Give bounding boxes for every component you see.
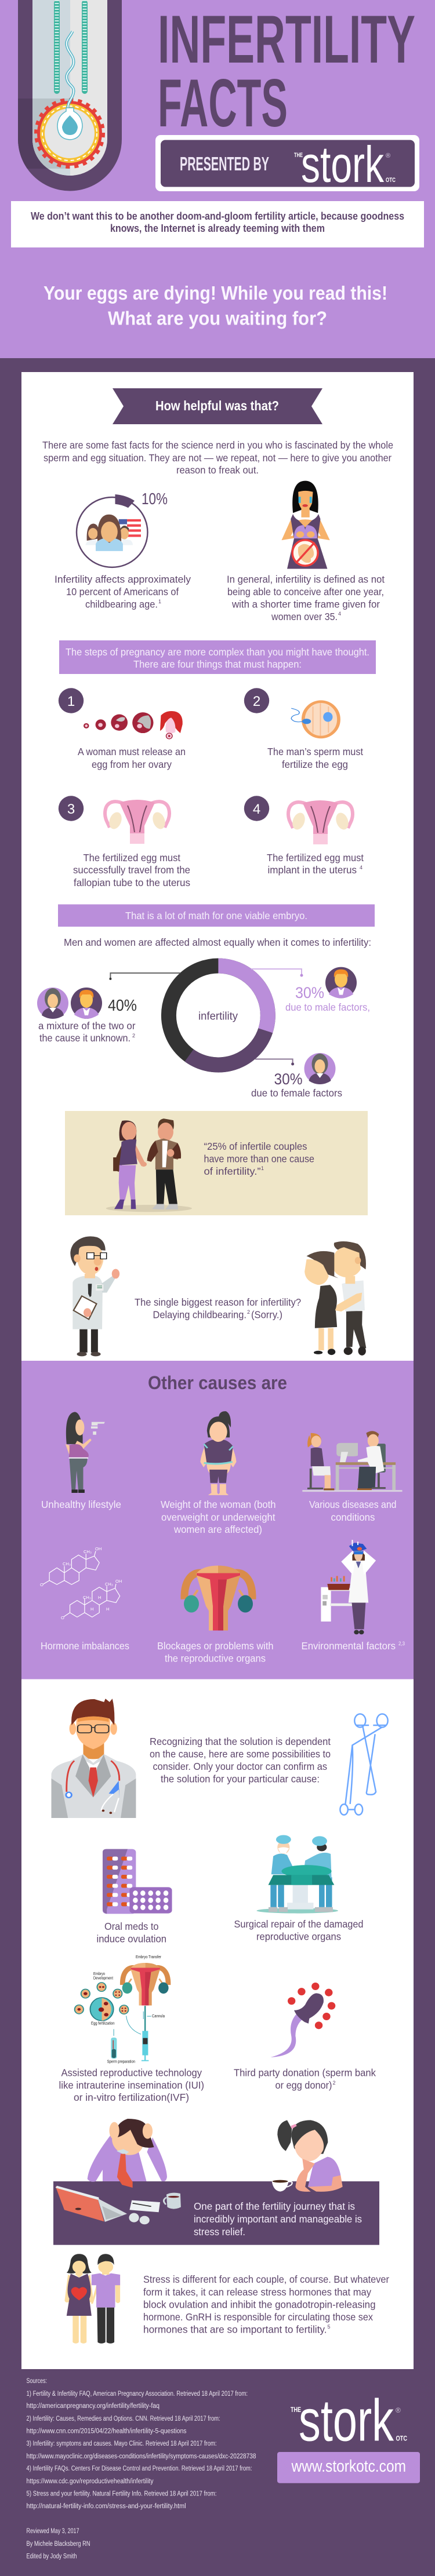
text: 10 percent of Americans: 10 percent of Americans of: [66, 586, 179, 597]
illustration: hormone molecules: CH₃: [83, 1595, 91, 1600]
text: step 3: fallopian tube to the uterus: [74, 877, 190, 888]
text: assisted reproductive technology: [59, 2067, 204, 2103]
title: FACTS: [158, 65, 288, 141]
illustration: hormone molecules: CH₃: [105, 1582, 113, 1587]
text: oral meds: induce ovulation: [96, 1933, 166, 1945]
icon: sperm fertilizing egg: [291, 702, 339, 737]
text: step 3: [73, 852, 190, 888]
illustration: hormone molecules: CH₃: [63, 1561, 71, 1566]
text: third party donation: 2: [333, 2080, 336, 2086]
step 4: [244, 796, 364, 876]
stat: 40 percent mixed: a mixture of the two or: [38, 1020, 136, 1032]
heading ribbon: how helpful: How helpful was that?: [155, 398, 279, 413]
text: solution possibilities: Recognizing that the solution is dependent: [150, 1736, 331, 1747]
sources list: 4) Infertility FAQs. Centers For Disease Control and Prevention. Retrieved 18 April 2017 from:: [27, 2465, 252, 2472]
illustration: worried couple: [304, 1241, 366, 1356]
text: assisted reproductive technology: or in-vitro fertilization(IVF): [74, 2092, 189, 2103]
sources list: https://www.cdc.gov/reproductivehealth/infertility: [27, 2478, 154, 2485]
text: fast facts intro: reason to freak out.: [176, 464, 259, 476]
text: fast facts intro: sperm and egg situation. They are not — we repeat, not — here to give you another: [44, 452, 392, 464]
icon: test tube with sperm and egg: [18, 0, 122, 191]
text: 10 percent of Americans: Infertility affects approximately: [55, 574, 191, 585]
callout: steps of pregnancy: There are four things that must happen:: [133, 658, 302, 670]
stat: 30 percent female: due to female factors: [251, 1087, 342, 1099]
text: weight: overweight or underweight: [161, 1511, 276, 1523]
illustration: IVF diagram: Development: [93, 1976, 113, 1981]
website button: www.storkotc.com: [291, 2457, 406, 2476]
illustration: IVF diagram: Egg fertilization: [91, 2021, 115, 2026]
sources list: Sources:: [27, 2378, 47, 2385]
illustration: hormone molecules: O: [61, 1615, 64, 1620]
icon: ovarian follicles: [84, 711, 183, 739]
text: hormone imbalances: Hormone imbalances: [41, 1640, 129, 1652]
text: stress hormones: hormone. GnRH is responsible for circulating those sex: [143, 2311, 373, 2323]
illustration: IVF diagram: Cannula: [152, 2014, 165, 2018]
text: blockages: Blockages or problems with: [157, 1640, 274, 1652]
text: step 2: [267, 746, 363, 770]
illustration: IVF diagram: [75, 1955, 169, 2064]
icon: uterus implant: [288, 800, 353, 844]
sources list: Reviewed May 3, 2017: [27, 2528, 79, 2535]
icon: surgical forceps: [340, 1714, 388, 1815]
stat: 30 percent female: 30%: [274, 1070, 303, 1088]
text: third party donation: Third party donation (sperm bank: [234, 2067, 376, 2078]
presented by badge: OTC: [386, 177, 396, 184]
text: diseases: Various diseases and: [309, 1499, 397, 1510]
sources list: 1) Fertility & Infertility FAQ, American Pregnancy Association. Retrieved 18 April 2017 from:: [27, 2391, 248, 2398]
text: unhealthy lifestyle: Unhealthy lifestyle: [41, 1499, 121, 1510]
text: quote: 1: [261, 1165, 264, 1171]
callout: lot of math: That is a lot of math for one viable embryo.: [125, 910, 307, 921]
text: men and women affected: Men and women are affected almost equally when it comes to infertility:: [64, 937, 371, 948]
step 2: 2: [253, 694, 260, 709]
text: assisted reproductive technology: Assisted reproductive technology: [61, 2067, 202, 2078]
text: step 4: [267, 852, 364, 876]
text: step 3: successfully travel from the: [73, 864, 190, 876]
illustration: lab scientist: [321, 1540, 376, 1634]
text: biggest reason: Delaying childbearing.: [153, 1309, 246, 1320]
intro text panel: knows, the Internet is already teeming with them: [110, 223, 325, 234]
text: stress relief: One part of the fertility journey that is: [194, 2200, 355, 2212]
text: 10 percent of Americans: [55, 574, 191, 610]
logo: the stork otc: stork: [299, 2388, 394, 2454]
heading ribbon: how helpful: [113, 388, 322, 424]
connector lines: [109, 969, 303, 1065]
callout: steps of pregnancy: [59, 640, 376, 674]
text: step 4: implant in the uterus: [268, 864, 357, 876]
intro text panel: [11, 201, 424, 247]
illustration: IVF diagram: Sperm preparation: [107, 2060, 135, 2064]
illustration: IVF diagram: Embryo: [93, 1972, 105, 1976]
text: fast facts intro: [42, 439, 393, 476]
text: step 1: egg from her ovary: [92, 759, 172, 770]
illustration: surgeons at operating table: [256, 1835, 338, 1914]
text: step 1: A woman must release an: [78, 746, 186, 757]
text: step 3: The fertilized egg must: [84, 852, 180, 863]
text: biggest reason: 2: [247, 1309, 250, 1315]
illustration: hormone molecules: H: [90, 1606, 93, 1612]
text: weight: Weight of the woman (both: [161, 1499, 276, 1510]
illustration: hormone molecules: OH: [95, 1546, 102, 1551]
text: stress hormones: form it takes, it can release stress hormones that may: [143, 2286, 371, 2298]
text: assisted reproductive technology: like intrauterine insemination (IUI): [59, 2079, 204, 2091]
stat: 40 percent mixed: 40%: [108, 996, 137, 1014]
white panel: [21, 372, 414, 1361]
illustration: hormone molecules: H: [98, 1595, 101, 1600]
text: 10 percent of Americans: 1: [158, 599, 161, 604]
stat: 40 percent mixed: the cause it unknown.: [39, 1032, 130, 1044]
text: stress hormones: [143, 2273, 389, 2335]
donut chart: infertility: [198, 1011, 238, 1022]
text: step 1: [78, 746, 186, 770]
sources list: http://natural-fertility-info.com/stress-and-your-fertility.html: [27, 2503, 186, 2510]
sources list: 3) Infertility: symptoms and causes. Mayo Clinic. Retrieved 18 April 2017 from:: [27, 2440, 217, 2447]
text: blockages: the reproductive organs: [165, 1653, 266, 1664]
presented by badge: [155, 135, 419, 193]
illustration: doctor with stethoscope: [51, 1699, 136, 1818]
presented by badge: PRESENTED BY: [180, 154, 269, 175]
label: 10%: 10%: [142, 490, 168, 508]
stat: 30 percent male: [285, 967, 370, 1013]
white panel lower: [21, 1679, 414, 2369]
text: step 4: 4: [360, 865, 362, 870]
logo: the stork otc: ®: [396, 2406, 401, 2414]
illustration: laptop, papers and mug: [56, 2186, 181, 2224]
text: infertility definition: 4: [338, 611, 341, 617]
text: infertility definition: being able to conceive after one year,: [227, 586, 384, 597]
website button: [277, 2452, 420, 2483]
step 1: 1: [67, 694, 75, 709]
text: oral meds: Oral meds to: [104, 1921, 159, 1932]
text: weight: [161, 1499, 276, 1535]
sources list: By Michele Blacksberg RN: [27, 2541, 90, 2548]
step 4: 4: [253, 801, 260, 817]
stat: 30 percent male: 30%: [295, 984, 324, 1001]
illustration: stressed man: [88, 2119, 167, 2188]
title: [158, 1, 415, 141]
text: quote: [204, 1141, 314, 1177]
callout: steps of pregnancy: The steps of pregnancy are more complex than you might have thought.: [66, 646, 369, 658]
panel: quote on couples: [65, 1111, 368, 1215]
text: stress relief: stress relief.: [194, 2226, 245, 2238]
text: quote: of infertility.”: [204, 1165, 261, 1177]
text: fast facts intro: There are some fast facts for the science nerd in you who is fascinated by the whole: [42, 439, 393, 451]
presented by badge: THE: [294, 152, 303, 159]
text: environmental factors: 2,3: [398, 1641, 405, 1646]
sources list: 5) Stress and your fertility. Natural Fertility Info. Retrieved 18 April 2017 from:: [27, 2491, 217, 2498]
sources list: 2) Infertility: Causes, Remedies and Options. CNN. Retrieved 18 April 2017 from:: [27, 2415, 220, 2422]
text: solution possibilities: [150, 1736, 331, 1785]
sources list: http://www.cnn.com/2015/04/22/health/infertility-5-questions: [27, 2428, 187, 2435]
stat: 30 percent male: due to male factors,: [285, 1001, 370, 1013]
text: solution possibilities: the solution for your particular cause:: [161, 1773, 320, 1785]
text: blockages: [157, 1640, 274, 1664]
text: oral meds: [96, 1921, 166, 1945]
text: biggest reason: The single biggest reason for infertility?: [135, 1296, 301, 1308]
text: quote: “25% of infertile couples: [204, 1141, 307, 1152]
text: stress hormones: Stress is different for each couple, of course. But whatever: [143, 2273, 389, 2285]
text: infertility definition: women over 35.: [271, 611, 338, 622]
illustration: doctor with clipboard: [70, 1236, 119, 1356]
text: environmental factors: Environmental factors: [302, 1640, 396, 1652]
illustration: expecting couple with heart: [64, 2254, 120, 2344]
illustration: hormone molecules: H: [106, 1606, 109, 1612]
text: infertility definition: [227, 574, 385, 622]
illustration: doctor consultation: [302, 1431, 403, 1492]
text: biggest reason: [135, 1296, 301, 1320]
icon: 10 percent ring with people and flag: [77, 494, 147, 567]
sources list: Edited by Jody Smith: [27, 2553, 77, 2560]
step 3: [59, 796, 190, 888]
text: surgical repair: Surgical repair of the damaged: [234, 1918, 363, 1930]
text: step 2: The man’s sperm must: [267, 746, 363, 757]
text: stress relief: incredibly important and manageable is: [194, 2213, 362, 2225]
text: diseases: conditions: [331, 1511, 375, 1523]
icon: sperm and egg cells: [270, 1983, 335, 2057]
logo: the stork otc: THE: [291, 2407, 301, 2414]
illustration: reproductive organs with blockage: [184, 1566, 253, 1631]
sources list: [27, 2378, 256, 2560]
sources list: http://www.mayoclinic.org/diseases-conditions/infertility/symptoms-causes/dxc-20228738: [27, 2453, 256, 2460]
text: 10 percent of Americans: childbearing age.: [85, 598, 158, 610]
stat: 40 percent mixed: [37, 988, 137, 1044]
illustration: smoking pregnant woman: [66, 1412, 105, 1493]
illustration: hormone molecules: CH₃: [84, 1549, 92, 1554]
text: diseases: [309, 1499, 397, 1523]
text: stress hormones: hormones that are so important to fertility.: [143, 2324, 327, 2335]
text: third party donation: [234, 2067, 376, 2091]
step 1: [59, 688, 186, 770]
icon: crying woman with no-pregnancy sign: [281, 481, 330, 569]
panel: other causes: [21, 1361, 414, 1679]
heading: other causes: Other causes are: [148, 1372, 287, 1393]
text: stress hormones: block ovulation and inhibit the gonadotropin-releasing: [143, 2298, 376, 2310]
step 2: [244, 688, 363, 770]
illustration: hormone molecules: O: [40, 1582, 44, 1587]
presented by badge: ®: [386, 152, 390, 159]
text: weight: women are affected): [173, 1524, 262, 1535]
text: third party donation: or egg donor): [275, 2079, 332, 2091]
sources list: http://americanpregnancy.org/infertility/fertility-faq: [27, 2403, 160, 2410]
text: stress hormones: 5: [327, 2324, 331, 2330]
icon: uterus: [105, 800, 169, 844]
stat: 30 percent female: [251, 1053, 342, 1099]
text: biggest reason: (Sorry.): [251, 1309, 282, 1320]
text: solution possibilities: consider. Only your doctor can confirm as: [153, 1761, 327, 1772]
headline: [44, 282, 387, 329]
step 3: 3: [67, 801, 75, 817]
text: stress relief: [194, 2200, 362, 2238]
illustration: overweight woman: [200, 1411, 237, 1495]
text: quote: have more than one cause: [204, 1153, 314, 1165]
panel: stress relief desk: [53, 2119, 379, 2245]
text: step 4: The fertilized egg must: [267, 852, 364, 863]
text: surgical repair: reproductive organs: [256, 1931, 341, 1943]
illustration: tired woman: [272, 2120, 343, 2192]
headline: Your eggs are dying! While you read this!: [44, 282, 387, 304]
presented by badge: stork: [301, 136, 385, 193]
illustration: couple holding hands: [106, 1118, 192, 1212]
text: solution possibilities: on the cause, here are some possibilities to: [150, 1748, 331, 1759]
illustration: pill packs: [103, 1849, 172, 1914]
illustration: hormone molecules: [40, 1546, 122, 1620]
illustration: IVF diagram: Embryo Transfer: [136, 1955, 162, 1959]
illustration: hormone molecules: OH: [115, 1579, 122, 1584]
callout: lot of math: [58, 904, 375, 927]
text: infertility definition: with a shorter time frame given for: [231, 598, 380, 610]
text: step 2: fertilize the egg: [282, 759, 348, 770]
text: infertility definition: In general, infertility is defined as not: [227, 574, 385, 585]
donut chart: [169, 965, 268, 1065]
text: surgical repair: [234, 1918, 363, 1943]
logo: the stork otc: OTC: [396, 2435, 407, 2442]
headline: What are you waiting for?: [108, 307, 327, 329]
stat: 40 percent mixed: 2: [132, 1033, 135, 1039]
